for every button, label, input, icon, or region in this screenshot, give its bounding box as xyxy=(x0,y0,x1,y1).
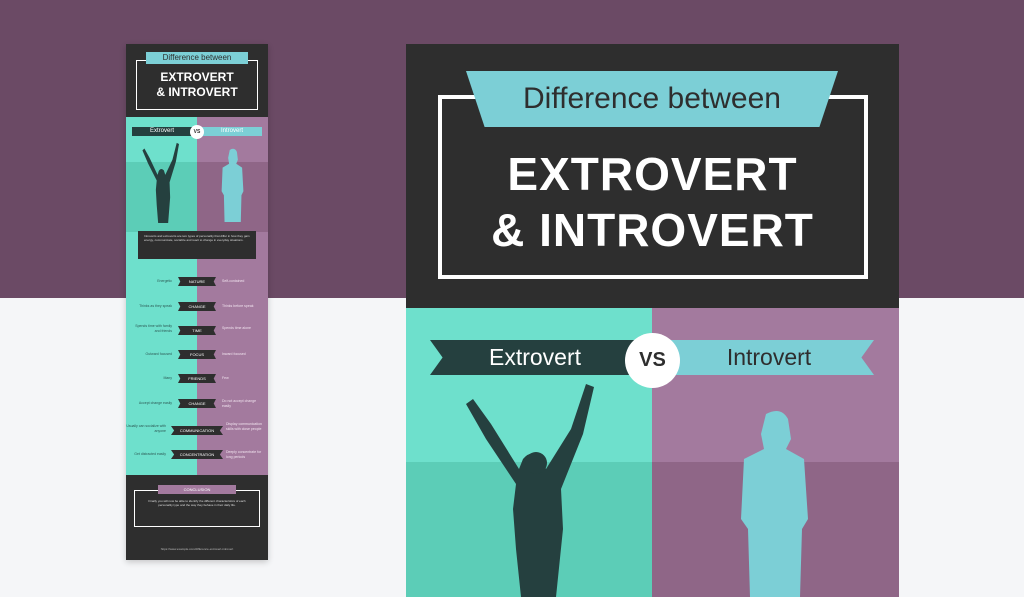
header frame xyxy=(438,95,868,279)
small infographic thumbnail: Do not accept change easily xyxy=(222,399,256,408)
small infographic thumbnail: Spends time with family and friends xyxy=(135,324,172,333)
small infographic thumbnail: CONCENTRATION xyxy=(180,452,214,457)
introvert banner: Introvert xyxy=(727,344,811,370)
small header xyxy=(126,44,268,117)
small infographic thumbnail: Usually can socialize with anyone xyxy=(126,424,166,433)
comparison rows xyxy=(126,277,262,459)
small infographic thumbnail: CHANGE xyxy=(188,304,206,309)
description box: Introverts and extroverts are two types of personality that differ in how they gain energy, communicate, socialize and react to change in everyday situations. xyxy=(144,234,250,242)
small infographic thumbnail xyxy=(126,44,268,560)
small infographic thumbnail: Deeply concentrate for long periods xyxy=(226,450,261,459)
small infographic thumbnail: CHANGE xyxy=(188,401,206,406)
background top band xyxy=(0,0,1024,298)
small infographic thumbnail: Many xyxy=(163,376,172,380)
small vs banner xyxy=(132,127,192,136)
small vs banner: Extrovert xyxy=(150,128,174,134)
header xyxy=(406,44,899,308)
small header: EXTROVERT xyxy=(160,70,234,84)
small infographic thumbnail: Energetic xyxy=(157,279,172,283)
small infographic thumbnail: NATURE xyxy=(189,279,205,284)
small infographic thumbnail: Inward focused xyxy=(222,352,246,356)
small header: Difference between xyxy=(163,53,231,62)
icon: introvert silhouette xyxy=(741,411,808,597)
icon: small extrovert xyxy=(142,142,179,223)
title: & INTROVERT xyxy=(491,204,814,256)
icon: extrovert silhouette xyxy=(466,384,594,597)
conclusion xyxy=(126,475,268,560)
small infographic thumbnail: VS xyxy=(194,129,200,135)
title: EXTROVERT xyxy=(507,148,798,200)
small infographic thumbnail: Outward focused xyxy=(146,352,172,356)
small infographic thumbnail: Introvert xyxy=(221,128,243,134)
introvert banner xyxy=(664,340,874,375)
conclusion: CONCLUSION xyxy=(184,487,210,492)
small infographic thumbnail: FRIENDS xyxy=(188,376,206,381)
small infographic thumbnail: TIME xyxy=(192,328,202,333)
small infographic thumbnail: Thinks as they speak xyxy=(139,304,172,308)
small infographic thumbnail: FOCUS xyxy=(190,352,204,357)
vs circle xyxy=(625,333,680,388)
small infographic thumbnail: Self-contained xyxy=(222,279,244,283)
small infographic thumbnail: Get distracted easily xyxy=(134,452,166,456)
small infographic thumbnail: Spends time alone xyxy=(222,326,251,330)
small header: & INTROVERT xyxy=(156,85,238,99)
title xyxy=(491,148,814,256)
small infographic thumbnail: Display communication skills with close people xyxy=(226,422,262,431)
subtitle ribbon xyxy=(466,71,838,127)
conclusion: https://www.example.com/difference-extrovert-introvert xyxy=(161,547,233,551)
vs circle: VS xyxy=(639,349,666,371)
extrovert banner xyxy=(430,340,640,375)
subtitle ribbon: Difference between xyxy=(523,82,781,115)
small infographic thumbnail: Few xyxy=(222,376,229,380)
small infographic thumbnail: Accept change easily xyxy=(139,401,172,405)
icon: small introvert xyxy=(222,148,244,222)
description box xyxy=(138,231,256,259)
small infographic thumbnail: Thinks before speak xyxy=(222,304,254,308)
extrovert banner: Extrovert xyxy=(489,344,581,370)
large infographic preview xyxy=(406,44,899,597)
conclusion: Finally you will now be able to identify the different characteristics of each personality type and the way they behave in their daily life. xyxy=(148,499,246,507)
small infographic thumbnail: COMMUNICATION xyxy=(180,428,214,433)
